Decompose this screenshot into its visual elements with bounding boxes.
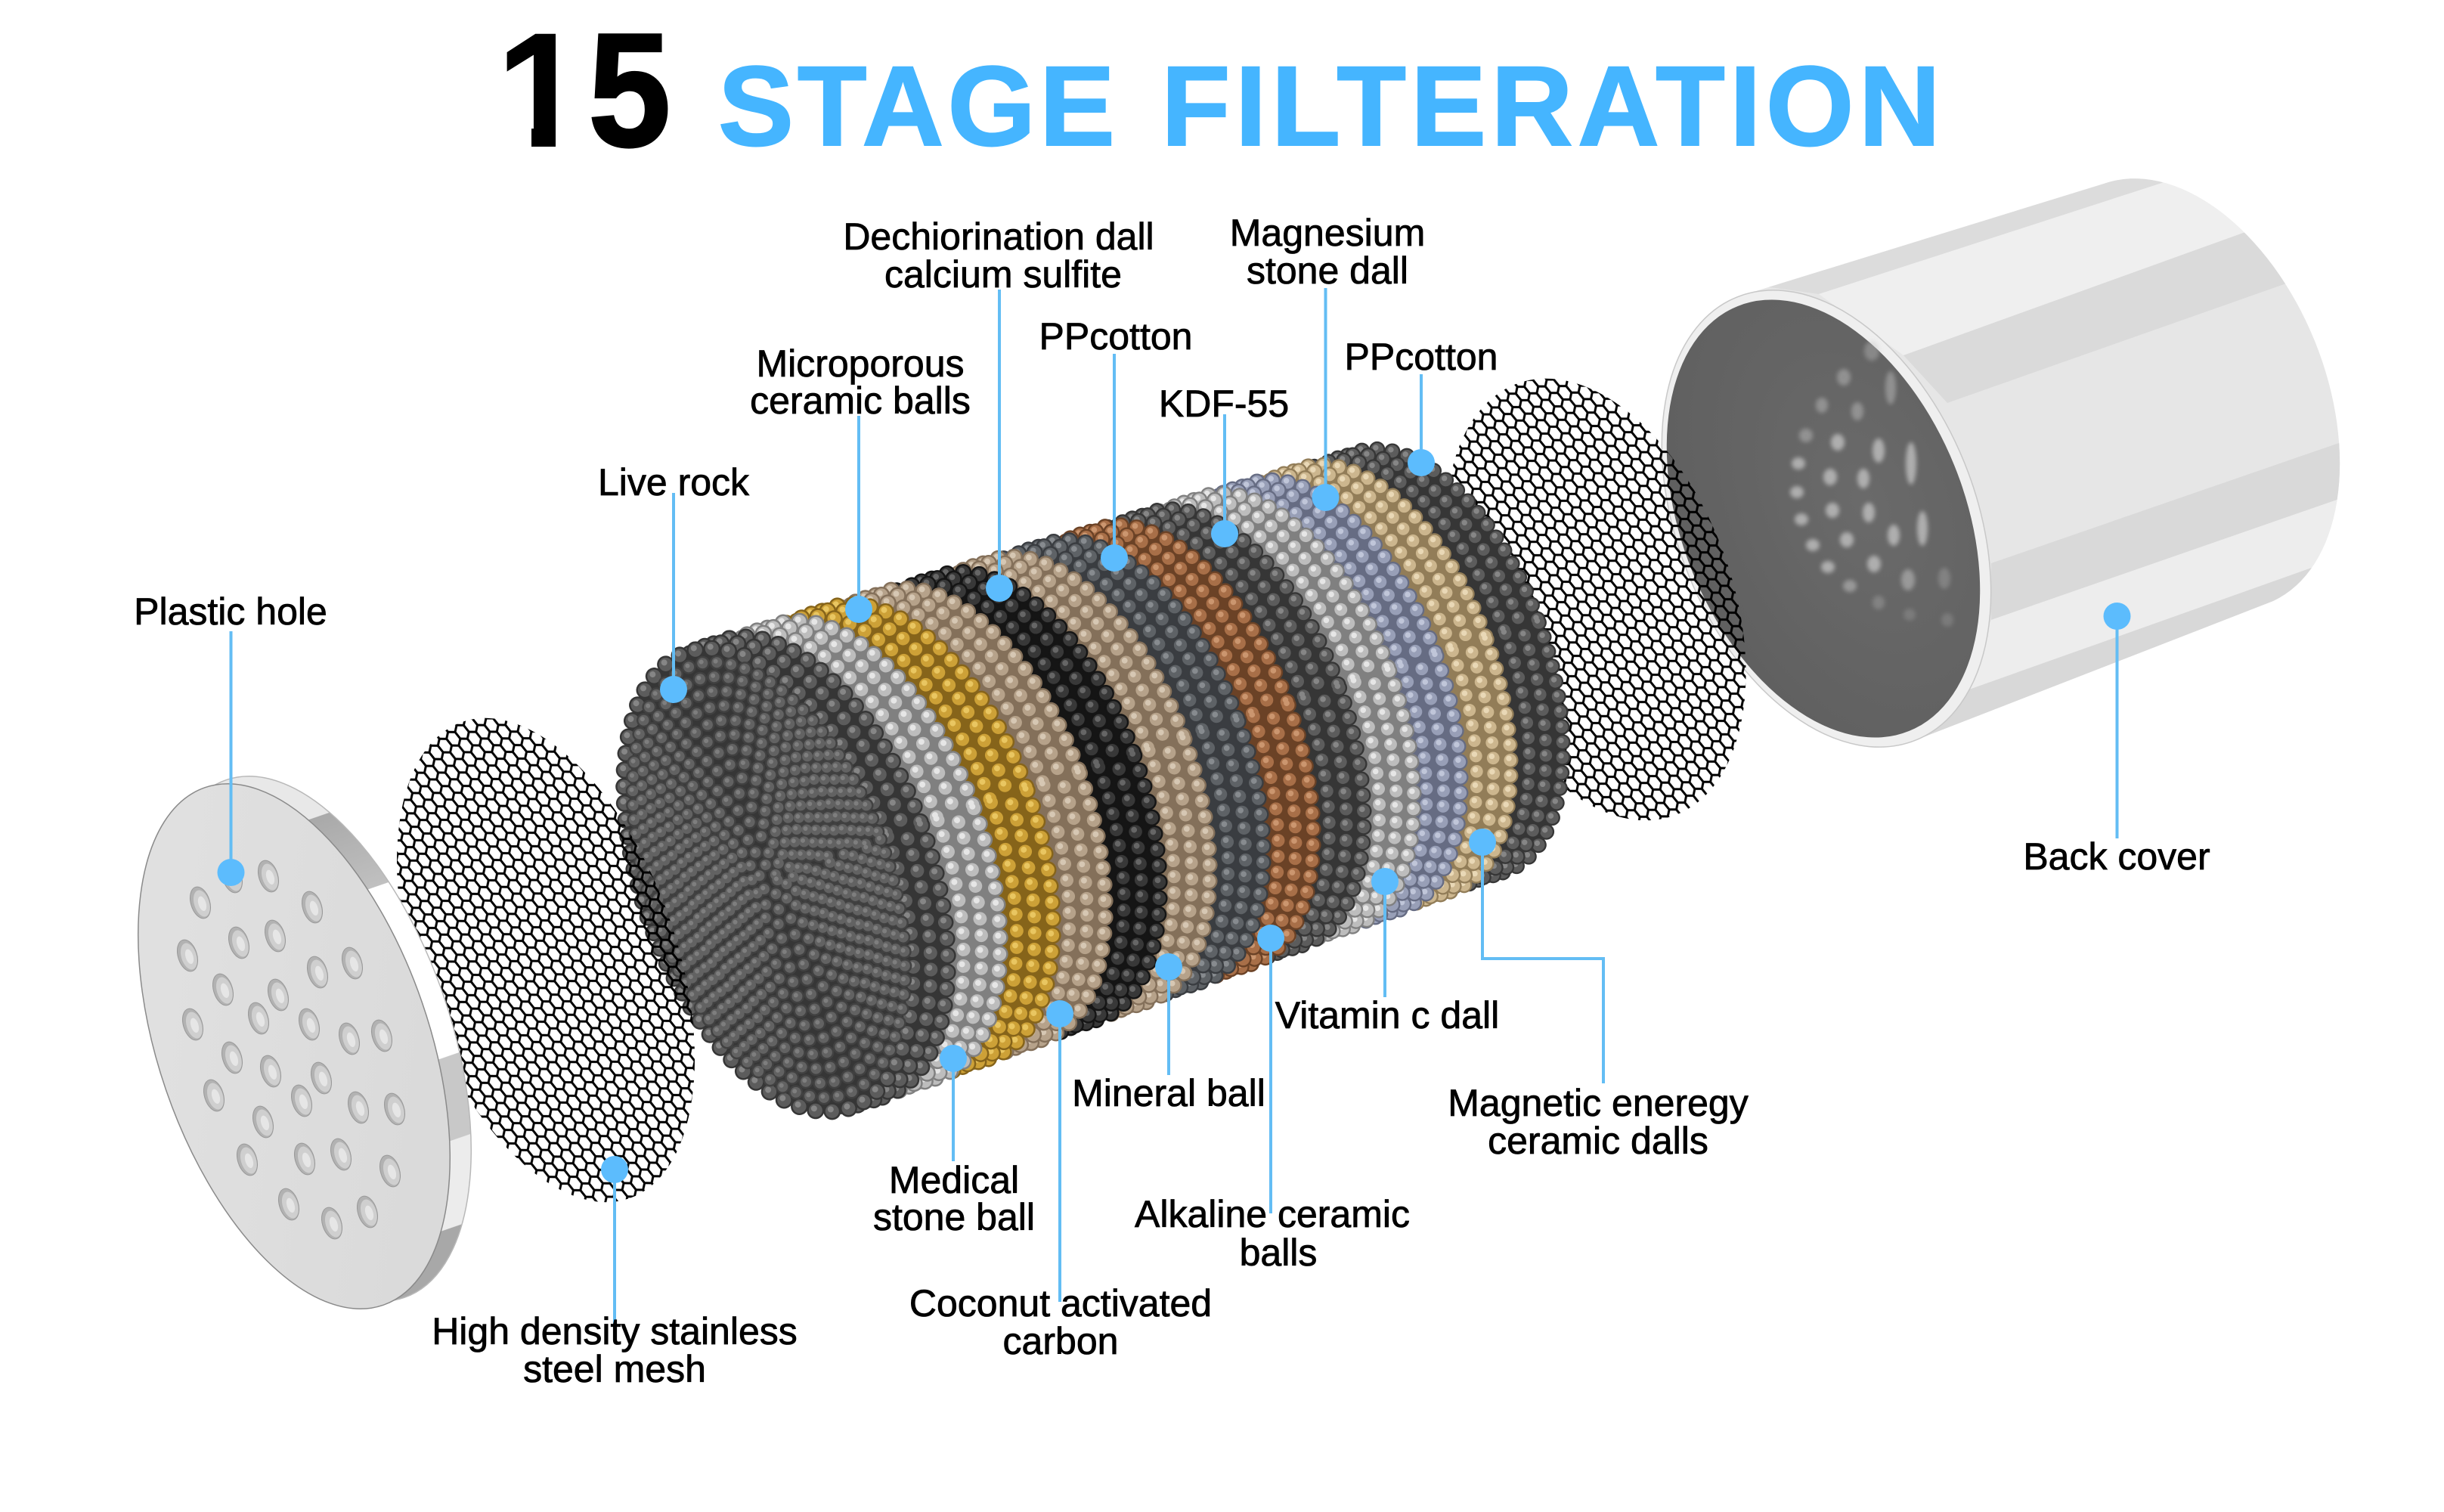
cover body: [1757, 178, 2340, 736]
callout: Magnesium stone dall: Magnesium: [1230, 212, 1425, 254]
callout: Live rock: [598, 461, 750, 703]
callout: Mineral ball: Mineral ball: [1072, 1072, 1265, 1114]
layer 8 tan beads: [838, 518, 1264, 1054]
callout: KDF-55: KDF-55: [1159, 383, 1289, 425]
layer 10 brown beads: [947, 487, 1367, 1015]
callout: Magnetic eneregy ceramic dalls: Magnetic eneregy: [1448, 1082, 1749, 1124]
callout: Magnesium stone dall: [1230, 212, 1425, 511]
title word STAGE: STAGE: [718, 42, 1115, 169]
callout: Back cover: [2023, 603, 2210, 878]
callout: Dechiorination dall calcium sulfite: calcium sulfite: [884, 253, 1122, 296]
callout: Alkaline ceramic balls: Alkaline ceramic: [1135, 1193, 1410, 1235]
plastic hole plate: [77, 736, 532, 1349]
callout: High density stainless steel mesh: [432, 1156, 798, 1390]
callout: Live rock: Live rock: [598, 461, 750, 503]
plate face: [77, 743, 511, 1349]
callout: Medical stone ball: Medical: [889, 1159, 1019, 1201]
callout: Mineral ball: [1072, 953, 1265, 1114]
callout: Back cover: Back cover: [2023, 835, 2210, 878]
callout: KDF-55: [1159, 383, 1289, 547]
callout: Plastic hole: [134, 590, 327, 886]
layer 9 slate beads: [894, 501, 1318, 1034]
layer 13 blue grey beads: [1102, 442, 1513, 960]
live rock front face: [578, 624, 958, 1135]
callout: High density stainless steel mesh: High density stainless: [432, 1310, 798, 1352]
callout: Dechiorination dall calcium sulfite: Dechiorination dall: [843, 215, 1154, 258]
title word FILTERATION: FILTERATION: [1161, 42, 1941, 169]
callout: Alkaline ceramic balls: balls: [1240, 1232, 1317, 1274]
callout: Vitamin c dall: [1275, 868, 1499, 1036]
callout: High density stainless steel mesh: steel mesh: [523, 1348, 706, 1390]
back cover cylinder: [1662, 178, 2340, 748]
layer 5 gold beads: [674, 564, 1109, 1112]
callout: Alkaline ceramic balls: [1135, 925, 1410, 1274]
callout: PPcotton rear: [1345, 336, 1498, 476]
callout: Coconut activated carbon: carbon: [1003, 1320, 1118, 1362]
callout: Medical stone ball: stone ball: [873, 1196, 1035, 1238]
callout: Microporous ceramic balls: ceramic balls: [750, 380, 971, 422]
plate holes: [174, 858, 408, 1241]
callout: Magnetic eneregy ceramic dalls: [1448, 829, 1749, 1162]
callout: PPcotton: PPcotton: [1039, 315, 1192, 358]
layer 11 dark beads: [1000, 471, 1417, 996]
callout: Magnetic eneregy ceramic dalls: ceramic dalls: [1488, 1120, 1708, 1162]
layer 6 tan beads: [729, 549, 1160, 1092]
callout: Microporous ceramic balls: Microporous: [756, 342, 965, 385]
callout: Coconut activated carbon: [909, 1000, 1212, 1362]
callout: Plastic hole: Plastic hole: [134, 590, 327, 633]
cover rim: [1599, 241, 2054, 796]
callout: Coconut activated carbon: Coconut activated: [909, 1282, 1212, 1325]
callout: PPcotton rear: PPcotton: [1345, 336, 1498, 378]
title: [506, 33, 1934, 149]
callout: Vitamin c dall: Vitamin c dall: [1275, 994, 1499, 1036]
layer 12 light grey beads: [1053, 455, 1467, 977]
callout: Microporous ceramic balls: [750, 342, 971, 623]
front steel mesh: [339, 679, 753, 1241]
cover inner wall: [1606, 253, 2040, 784]
callout: Dechiorination dall calcium sulfite: [843, 215, 1154, 602]
layer 7 black beads: [786, 532, 1215, 1073]
filter bead stack: [566, 412, 1615, 1151]
callout: PPcotton: [1039, 315, 1192, 572]
title digit 1: 1: [497, 0, 587, 181]
blurred hole reflections: [1790, 341, 1953, 627]
title digit 5: 5: [588, 0, 671, 181]
rear steel mesh: [1389, 337, 1802, 862]
layer 3 live rock rim: [566, 596, 1004, 1151]
layer 15 dark beads: [1210, 412, 1615, 922]
callout: Magnesium stone dall: stone dall: [1247, 249, 1408, 292]
callout: Medical stone ball: [873, 1045, 1035, 1238]
layer 4 white beads: [618, 581, 1056, 1132]
plate edge: [98, 736, 532, 1342]
layer 14 light tan beads: [1154, 427, 1563, 942]
